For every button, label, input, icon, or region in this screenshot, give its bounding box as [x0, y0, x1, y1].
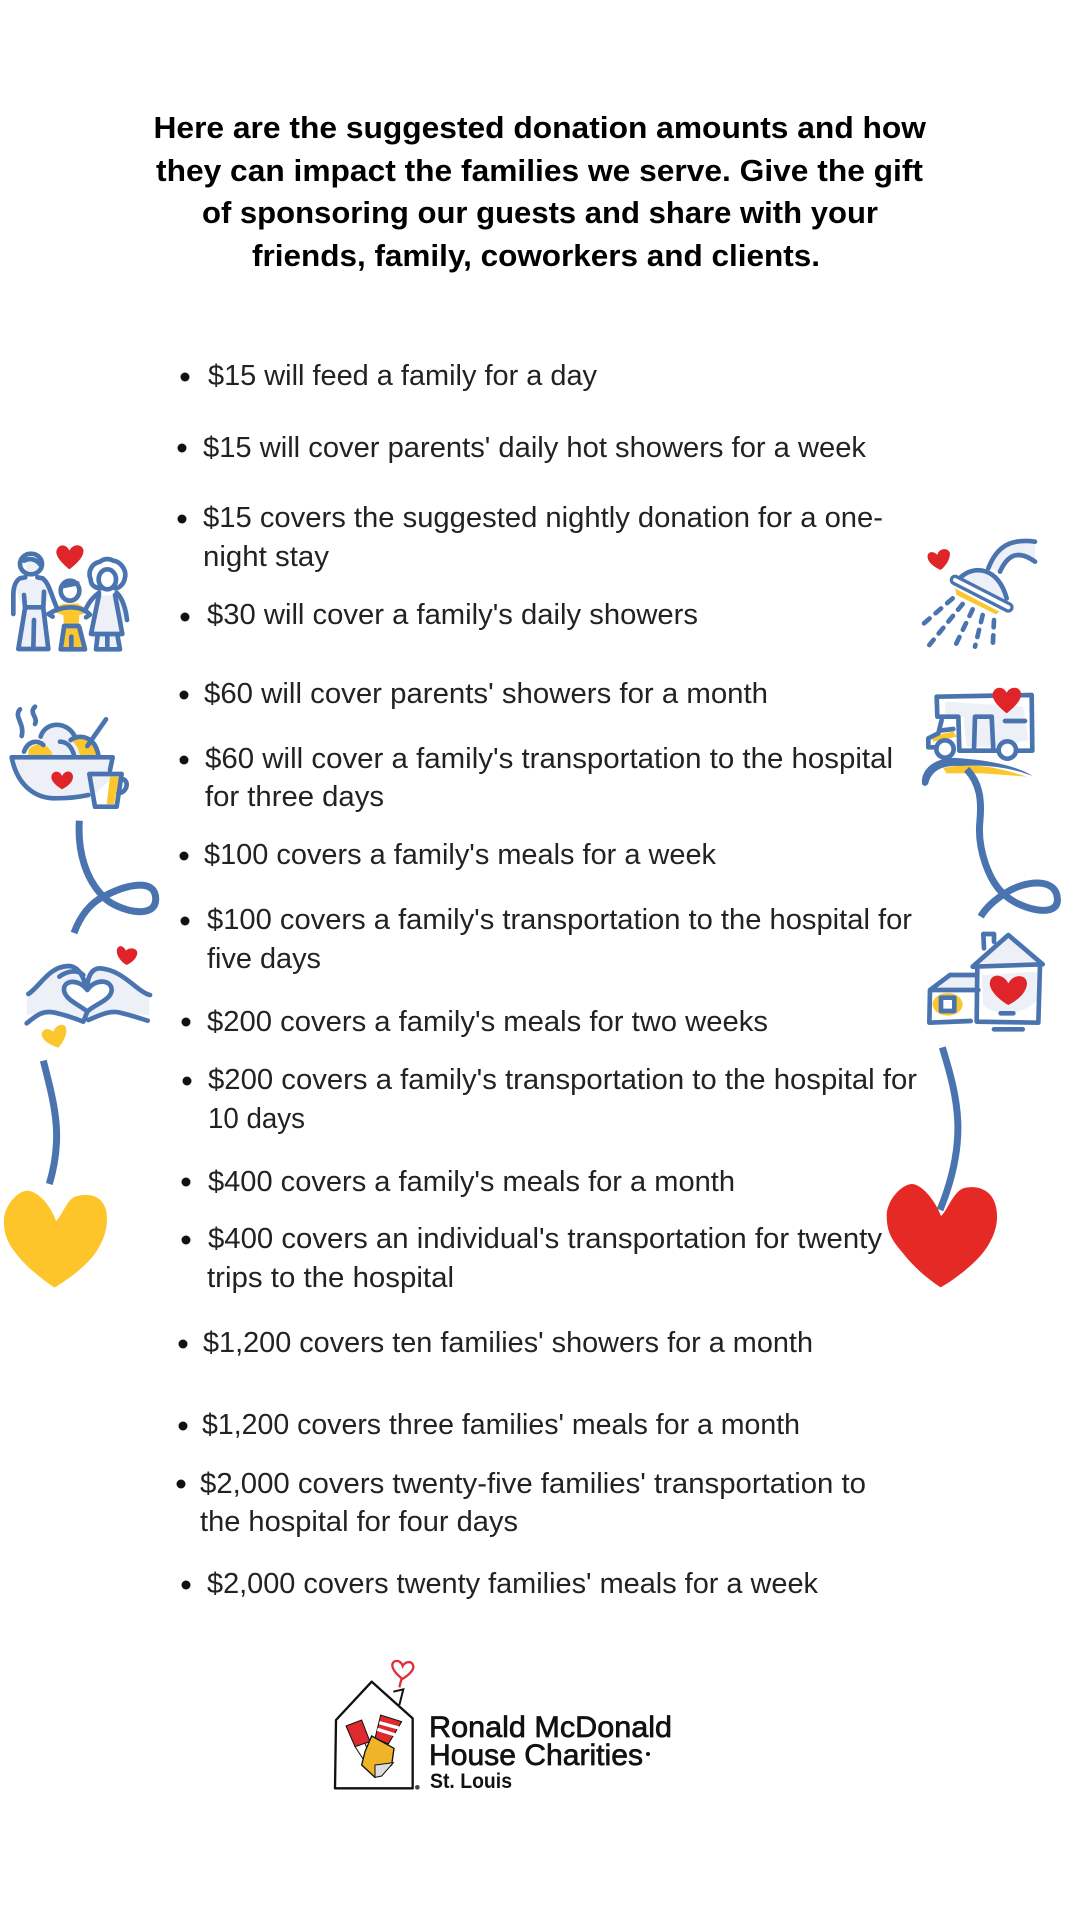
connector: right looping line [967, 769, 1057, 917]
icon: large red heart [887, 1184, 997, 1287]
donation list [176, 360, 917, 1600]
item: $400 transportation: $400 covers an individual's transportation for twenty [208, 1223, 882, 1255]
item: $200 meals: $200 covers a family's meals for two weeks [207, 1006, 768, 1038]
logo wordmark: House Charities [429, 1739, 643, 1772]
item: $30 showers: $30 will cover a family's daily showers [207, 599, 698, 631]
title: friends, family, coworkers and clients. [252, 238, 820, 273]
item: $2,000 transportation: $2,000 covers twenty-five families' transportation to [200, 1468, 866, 1500]
icon: house with heart [929, 934, 1043, 1029]
item: $100 transportation [180, 904, 912, 975]
item: $2,000 transportation: the hospital for four days [200, 1506, 518, 1538]
item: $15 nightly: $15 covers the suggested nightly donation for a one- [203, 502, 883, 534]
item: $400 transportation: trips to the hospital [207, 1262, 454, 1294]
icon: family [13, 545, 127, 649]
connector: right line to red heart [940, 1047, 958, 1210]
logo wordmark: Ronald McDonald [429, 1711, 672, 1744]
item: $200 transportation: 10 days [208, 1103, 305, 1135]
item: $15 nightly: night stay [203, 541, 329, 573]
item: $60 transportation: $60 will cover a family's transportation to the hospital [205, 743, 893, 775]
item: $60 transportation: for three days [205, 781, 384, 813]
item: $400 meals: $400 covers a family's meals for a month [208, 1166, 735, 1198]
title: they can impact the families we serve. Give the gift [156, 153, 923, 188]
logo [335, 1661, 672, 1793]
connector: left line to yellow heart [43, 1061, 57, 1184]
item: $2,000 transportation [176, 1468, 866, 1538]
logo wordmark: St. Louis [430, 1770, 512, 1793]
item: $1,200 meals: $1,200 covers three families' meals for a month [202, 1409, 800, 1441]
item: $2,000 meals: $2,000 covers twenty families' meals for a week [207, 1568, 818, 1600]
title: of sponsoring our guests and share with your [202, 195, 878, 230]
icon: camper van [922, 688, 1033, 786]
icon: hands forming a heart [27, 946, 150, 1048]
item: $200 transportation: $200 covers a family's transportation to the hospital for [208, 1064, 917, 1096]
item: $60 transportation [180, 743, 893, 813]
item: $100 transportation: five days [207, 943, 321, 975]
item: $100 transportation: $100 covers a family's transportation to the hospital for [207, 904, 912, 936]
logo wordmark [429, 1711, 672, 1793]
item: $15 nightly [178, 502, 883, 573]
connector: left looping line [74, 821, 156, 933]
item: $1,200 showers: $1,200 covers ten families' showers for a month [203, 1327, 813, 1359]
item: $60 showers: $60 will cover parents' showers for a month [204, 678, 768, 710]
icon: large yellow heart [4, 1191, 107, 1288]
icon: food bowl and cup [12, 707, 127, 807]
title: Here are the suggested donation amounts and how [154, 110, 927, 145]
item: $15 feed: $15 will feed a family for a day [208, 360, 597, 392]
title [154, 110, 927, 273]
item: $400 transportation [182, 1223, 882, 1294]
item: $100 meals: $100 covers a family's meals for a week [204, 839, 716, 871]
item: $200 transportation [182, 1064, 917, 1135]
item: $15 showers: $15 will cover parents' daily hot showers for a week [203, 432, 866, 464]
icon: shower head [924, 541, 1035, 648]
logo mark [335, 1661, 420, 1790]
